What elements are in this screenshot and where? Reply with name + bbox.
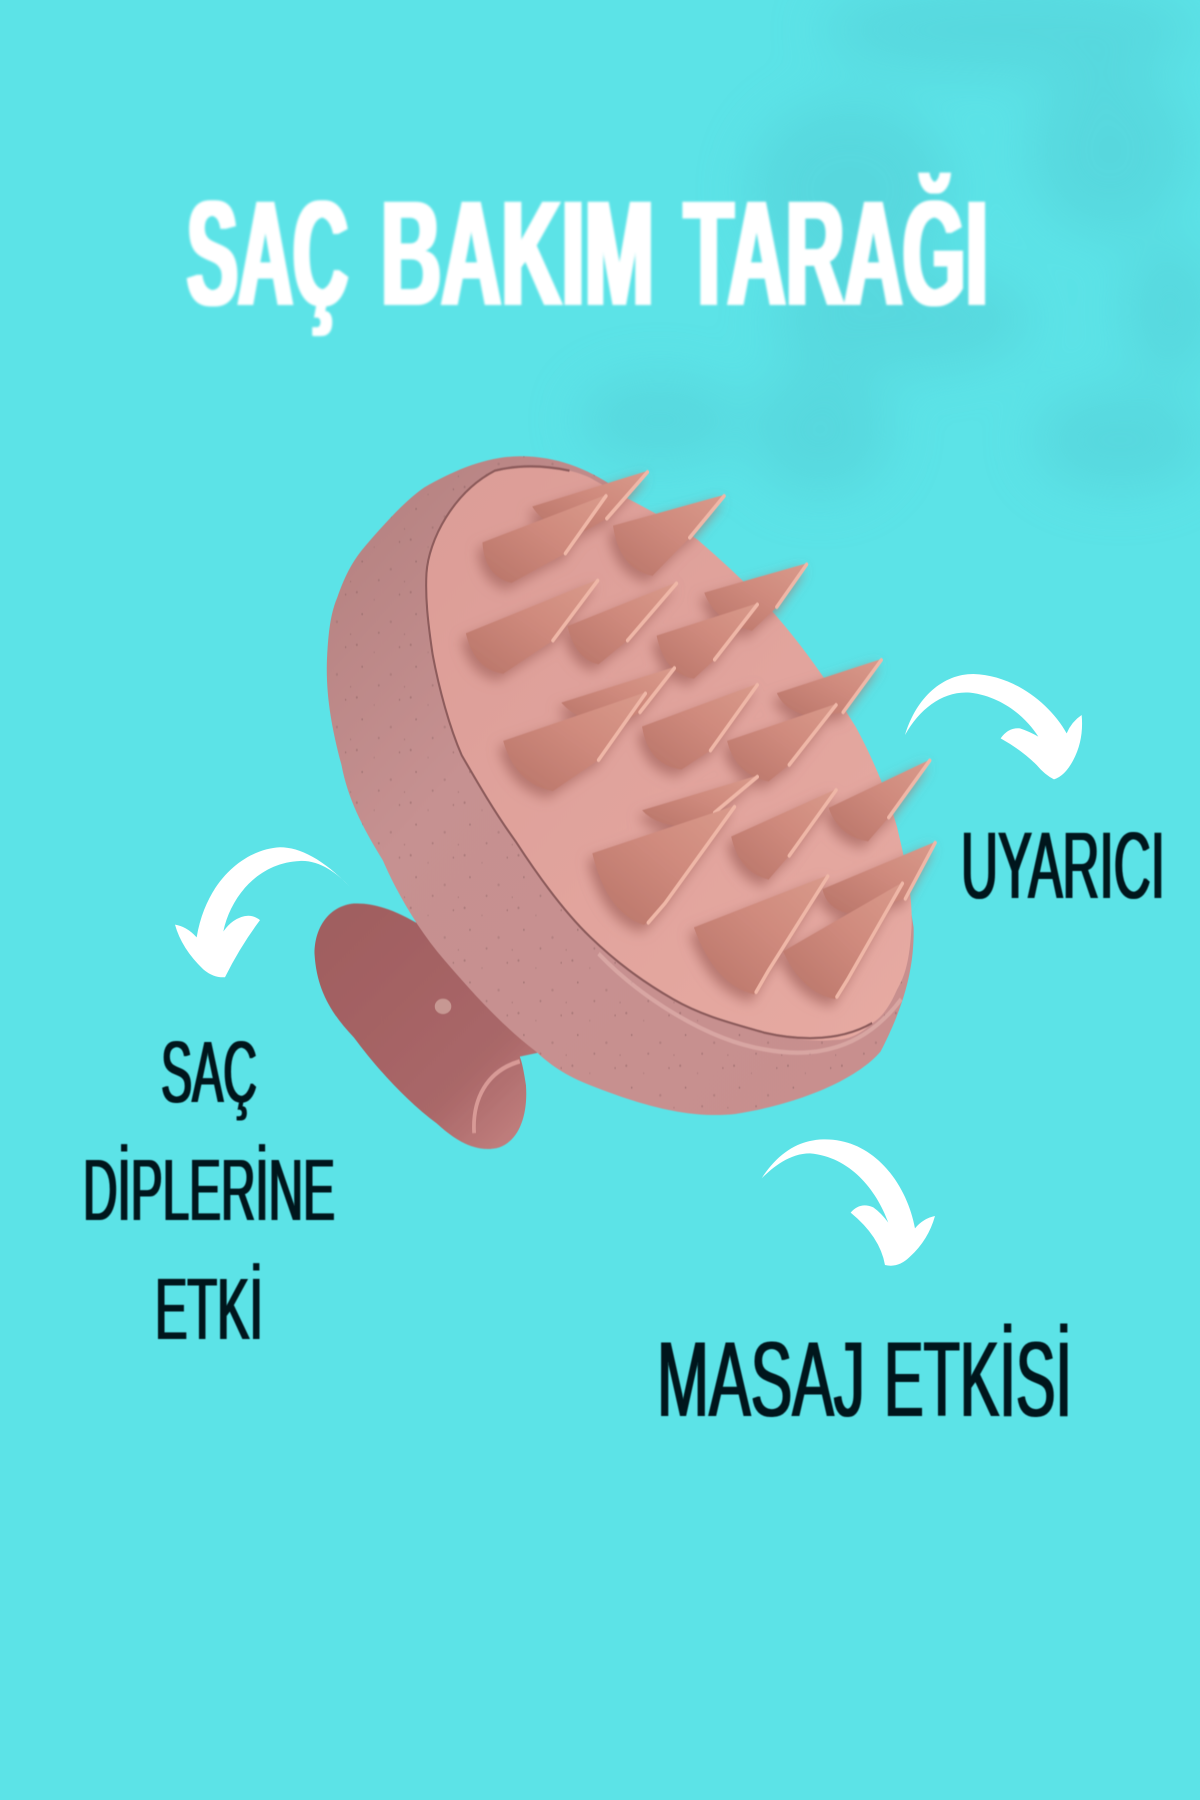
- arrow: left, toward hair roots label: [175, 847, 350, 977]
- arrow: right, toward UYARICI: [905, 674, 1082, 779]
- brush face: [426, 466, 912, 1053]
- brush handle: [315, 903, 565, 1149]
- title: SAÇ: [187, 169, 348, 337]
- background foliage shadow: [580, 0, 1200, 495]
- scalp massage brush: [315, 456, 936, 1149]
- label: SAÇ DİPLERİNE ETKİ: DİPLERİNE: [83, 1142, 335, 1239]
- title: [187, 169, 988, 337]
- brush bristles: [466, 471, 936, 999]
- label: SAÇ DİPLERİNE ETKİ: [83, 1024, 335, 1358]
- label: SAÇ DİPLERİNE ETKİ: ETKİ: [155, 1261, 263, 1358]
- label: SAÇ DİPLERİNE ETKİ: SAÇ: [161, 1024, 257, 1121]
- arrow: bottom, toward MASAJ ETKİSİ: [762, 1139, 935, 1266]
- brush body: [327, 456, 914, 1115]
- title: BAKIM: [381, 169, 654, 337]
- label: MASAJ ETKİSİ: MASAJ: [657, 1319, 865, 1439]
